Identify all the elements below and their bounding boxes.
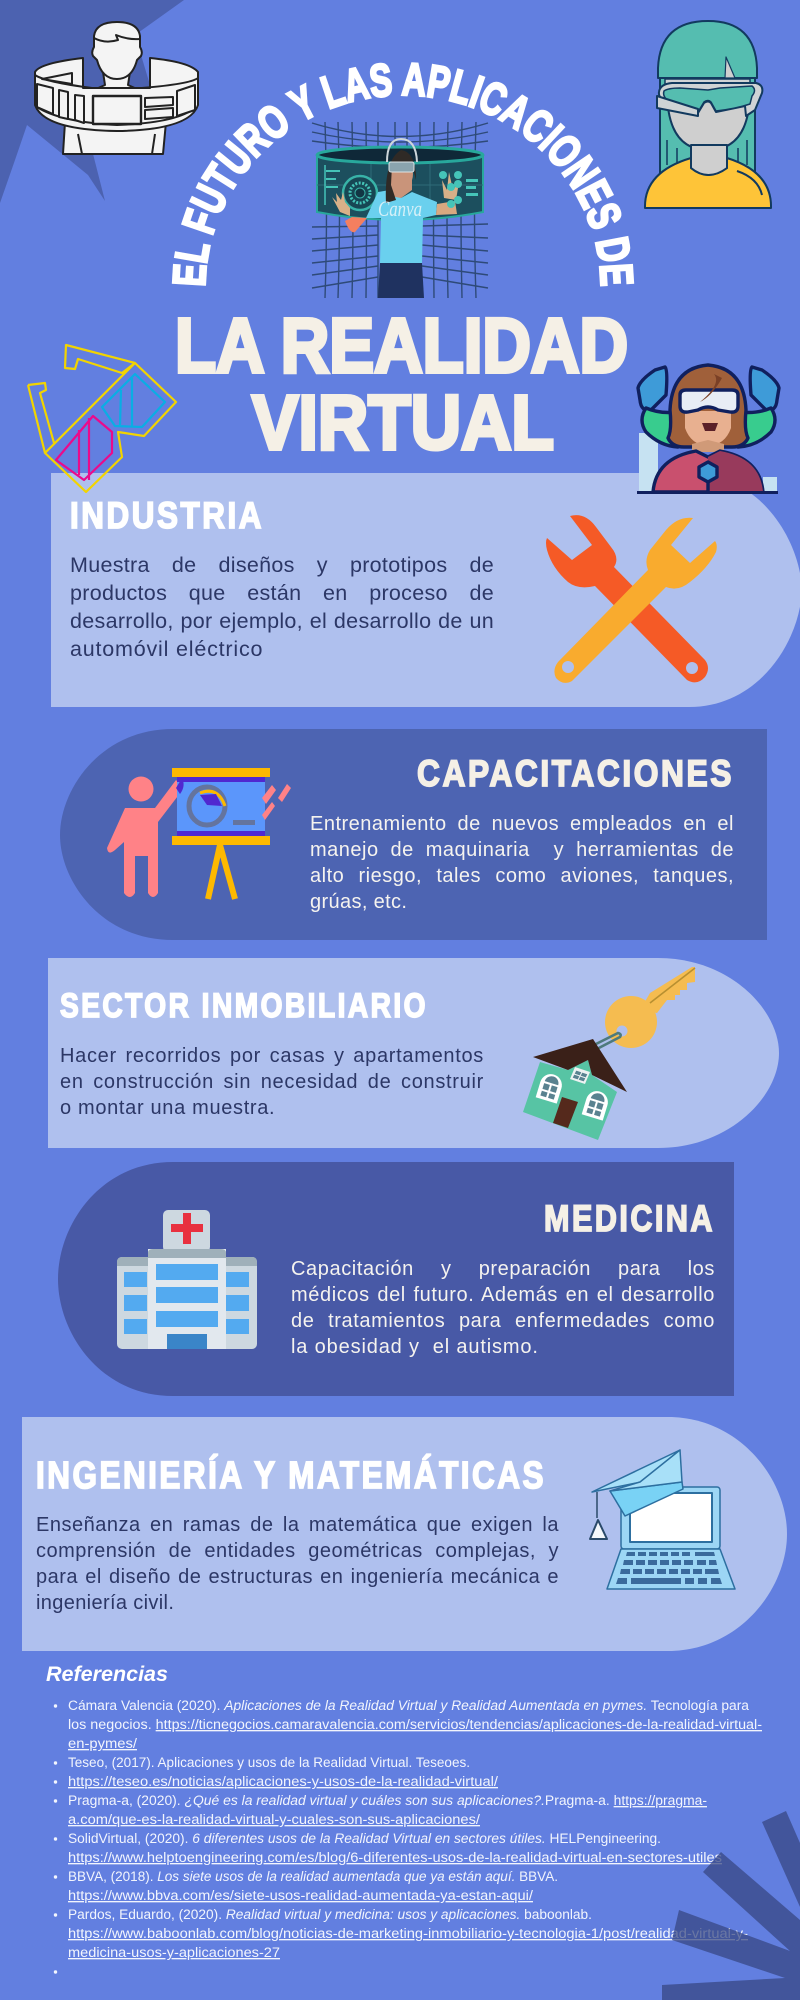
text: industria description: productos que están en proceso de	[70, 581, 494, 605]
icon: man with wraparound screen	[35, 22, 198, 154]
decorative rays bottom right	[662, 1811, 800, 2000]
title: la realidad virtual: VIRTUAL	[252, 380, 554, 466]
illustration: woman in virtual reality screen	[312, 122, 488, 298]
text: capacitaciones description	[310, 811, 740, 921]
text: sector inmobiliario description: en construcción sin necesidad de construir	[60, 1071, 484, 1093]
title: la realidad virtual: LA REALIDAD	[175, 303, 628, 389]
text: sector inmobiliario description	[60, 1043, 490, 1127]
decorative corner shape top left	[0, 0, 184, 203]
text: medicina description: de tratamientos para enfermedades como	[291, 1310, 715, 1332]
heading: medicina: MEDICINA	[544, 1198, 715, 1239]
text: medicina description	[291, 1256, 721, 1366]
reference list: SolidVirtual, (2020). 6 diferentes usos de la Realidad Virtual en sectores útiles. HELPengineering.	[68, 1831, 661, 1846]
heading: ingeniería y matemáticas: INGENIERÍA Y MATEMÁTICAS	[36, 1453, 546, 1497]
text: industria description: automóvil eléctrico	[70, 637, 263, 661]
text: medicina description: Capacitación y preparación para los	[291, 1258, 715, 1280]
text: sector inmobiliario description: o montar una muestra.	[60, 1097, 275, 1119]
text: ingeniería description: para el diseño de estructuras en ingeniería mecánica e	[36, 1566, 559, 1588]
panel: capacitaciones	[60, 729, 767, 940]
heading: referencias: Referencias	[46, 1663, 168, 1686]
panel: industria	[51, 473, 800, 707]
text: ingeniería description	[36, 1512, 566, 1622]
icon: woman with green hair and goggles	[645, 21, 771, 208]
panel: sector inmobiliario	[48, 958, 779, 1148]
panel: medicina	[58, 1162, 734, 1396]
reference list: https://www.baboonlab.com/blog/noticias-de-marketing-inmobiliario-y-tecnologia-1/post/realidad-virtual-y-	[68, 1926, 748, 1941]
text: industria description: Muestra de diseños y prototipos de	[70, 553, 494, 577]
grid	[312, 122, 488, 298]
text: sector inmobiliario description: Hacer recorridos por casas y apartamentos	[60, 1045, 484, 1067]
watermark: Canva	[378, 196, 422, 221]
text: medicina description: médicos del futuro. Además en el desarrollo	[291, 1284, 715, 1306]
reference list: a.com/que-es-la-realidad-virtual-y-cuales-son-sus-aplicaciones/	[68, 1812, 480, 1827]
icon: presenter at board	[107, 768, 291, 899]
title: arc heading: EL FUTURO Y LAS APLICACIONES DE	[172, 62, 634, 286]
panel: ingeniería y matemáticas	[22, 1417, 787, 1651]
reference list: BBVA, (2018). Los siete usos de la realidad aumentada que ya están aquí. BBVA.	[68, 1869, 558, 1884]
reference list: en-pymes/	[68, 1736, 137, 1751]
reference list	[54, 1698, 762, 1974]
icon: woman with VR visor	[637, 365, 779, 494]
reference list: Pardos, Eduardo, (2020). Realidad virtual y medicina: usos y aplicaciones. baboonlab.	[68, 1907, 592, 1922]
text: references	[46, 1663, 762, 1974]
icon: laptop with graduation cap	[590, 1450, 735, 1589]
text: capacitaciones description: Entrenamiento de nuevos empleados en el	[310, 813, 734, 835]
reference list: https://www.helptoengineering.com/es/blog/6-diferentes-usos-de-la-realidad-virtual-en-sectores-utiles	[68, 1850, 722, 1865]
icon: house key	[523, 967, 695, 1140]
reference list: https://teseo.es/noticias/aplicaciones-y-usos-de-la-realidad-virtual/	[68, 1774, 498, 1789]
reference list: los negocios. https://ticnegocios.camaravalencia.com/servicios/tendencias/aplicaciones-de-la-realidad-virtual-	[68, 1717, 762, 1732]
reference list: Cámara Valencia (2020). Aplicaciones de la Realidad Virtual y Realidad Aumentada en pymes. Tecnología para	[68, 1698, 750, 1713]
icon: 3D glasses	[28, 345, 176, 492]
text: industria description	[70, 551, 500, 671]
text: medicina description: la obesidad y el autismo.	[291, 1336, 539, 1358]
icon: hospital	[117, 1210, 257, 1349]
text: capacitaciones description: manejo de maquinaria y herramientas de	[310, 839, 734, 861]
text: ingeniería description: ingeniería civil.	[36, 1592, 174, 1614]
reference list: Teseo, (2017). Aplicaciones y usos de la Realidad Virtual. Teseoes.	[68, 1755, 470, 1770]
reference list: Pragma-a, (2020). ¿Qué es la realidad virtual y cuáles son sus aplicaciones?. Pragma-a. https://pragma-	[68, 1793, 707, 1808]
text: ingeniería description: Enseñanza en ramas de la matemática que exigen la	[36, 1514, 559, 1536]
heading: sector inmobiliario: SECTOR INMOBILIARIO	[60, 987, 428, 1025]
text: ingeniería description: comprensión de entidades geométricas complejas, y	[36, 1540, 559, 1562]
text: capacitaciones description: grúas, etc.	[310, 891, 407, 913]
reference list: https://www.bbva.com/es/siete-usos-realidad-aumentada-ya-estan-aqui/	[68, 1888, 533, 1903]
icon: crossed wrenches	[546, 515, 717, 683]
heading: industria: INDUSTRIA	[70, 495, 264, 536]
text: capacitaciones description: alto riesgo, tales como aviones, tanques,	[310, 865, 734, 887]
heading: capacitaciones: CAPACITACIONES	[417, 753, 734, 794]
text: industria description: desarrollo, por ejemplo, el desarrollo de un	[70, 609, 494, 633]
reference list: medicina-usos-y-aplicaciones-27	[68, 1945, 280, 1960]
title: la realidad virtual	[175, 303, 628, 466]
